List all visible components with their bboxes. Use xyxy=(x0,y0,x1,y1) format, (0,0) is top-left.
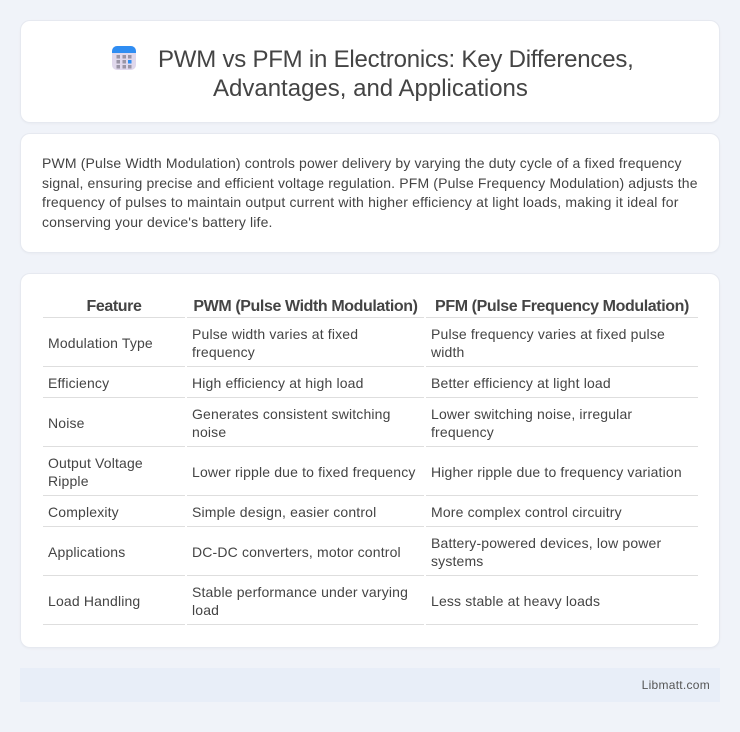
row: modulation type: Pulse width varies at fixed xyxy=(192,326,358,342)
footer text: Libmatt.com xyxy=(642,678,710,692)
row: modulation type: Modulation Type xyxy=(48,335,153,351)
row: modulation type: frequency xyxy=(192,344,255,360)
row: output voltage ripple: Lower ripple due to fixed frequency xyxy=(192,464,416,480)
intro text xyxy=(42,155,698,230)
row: efficiency xyxy=(48,375,611,391)
table header: PFM (Pulse Frequency Modulation) xyxy=(435,298,689,315)
table header: Feature xyxy=(86,298,142,315)
row: noise: Noise xyxy=(48,415,85,431)
row: complexity xyxy=(48,504,622,520)
intro text: signal, ensuring precise and efficient voltage regulation. PFM (Pulse Frequency Modulation) adjusts the xyxy=(42,175,698,191)
table card xyxy=(20,273,720,648)
row: noise: noise xyxy=(192,424,226,440)
intro text: PWM (Pulse Width Modulation) controls power delivery by varying the duty cycle of a fixed frequency xyxy=(42,155,682,171)
row: modulation type xyxy=(48,326,665,360)
row: efficiency: High efficiency at high load xyxy=(192,375,364,391)
row: applications xyxy=(48,535,661,569)
row: complexity: More complex control circuitry xyxy=(431,504,622,520)
row: noise: Generates consistent switching xyxy=(192,406,391,422)
table header: PWM (Pulse Width Modulation) xyxy=(193,298,418,315)
row: noise: frequency xyxy=(431,424,494,440)
row: applications: Applications xyxy=(48,544,125,560)
row: applications: Battery-powered devices, low power xyxy=(431,535,661,551)
row: noise xyxy=(48,406,632,440)
row: complexity: Simple design, easier control xyxy=(192,504,376,520)
row: applications: DC-DC converters, motor control xyxy=(192,544,401,560)
intro text: conserving your device's battery life. xyxy=(42,214,273,230)
table header xyxy=(86,298,689,315)
row: load handling: Stable performance under varying xyxy=(192,584,408,600)
row: efficiency: Efficiency xyxy=(48,375,109,391)
intro text: frequency of pulses to maintain output current with higher efficiency at light loads, making it ideal for xyxy=(42,194,679,210)
row: load handling: Load Handling xyxy=(48,593,140,609)
icon: calendar xyxy=(112,46,136,70)
intro card xyxy=(20,133,720,253)
title: Advantages, and Applications xyxy=(213,75,528,102)
row: load handling: load xyxy=(192,602,219,618)
row: output voltage ripple: Higher ripple due to frequency variation xyxy=(431,464,682,480)
title xyxy=(158,46,634,102)
title: PWM vs PFM in Electronics: Key Differences, xyxy=(158,46,634,73)
row: noise: Lower switching noise, irregular xyxy=(431,406,632,422)
header card xyxy=(20,20,720,123)
row: output voltage ripple xyxy=(48,455,682,489)
row: efficiency: Better efficiency at light load xyxy=(431,375,611,391)
row: load handling: Less stable at heavy loads xyxy=(431,593,600,609)
row: applications: systems xyxy=(431,553,483,569)
row: load handling xyxy=(48,584,600,618)
footer bar xyxy=(20,668,720,702)
row: output voltage ripple: Ripple xyxy=(48,473,89,489)
row: modulation type: Pulse frequency varies at fixed pulse xyxy=(431,326,665,342)
row: complexity: Complexity xyxy=(48,504,119,520)
row: modulation type: width xyxy=(431,344,464,360)
row: output voltage ripple: Output Voltage xyxy=(48,455,143,471)
